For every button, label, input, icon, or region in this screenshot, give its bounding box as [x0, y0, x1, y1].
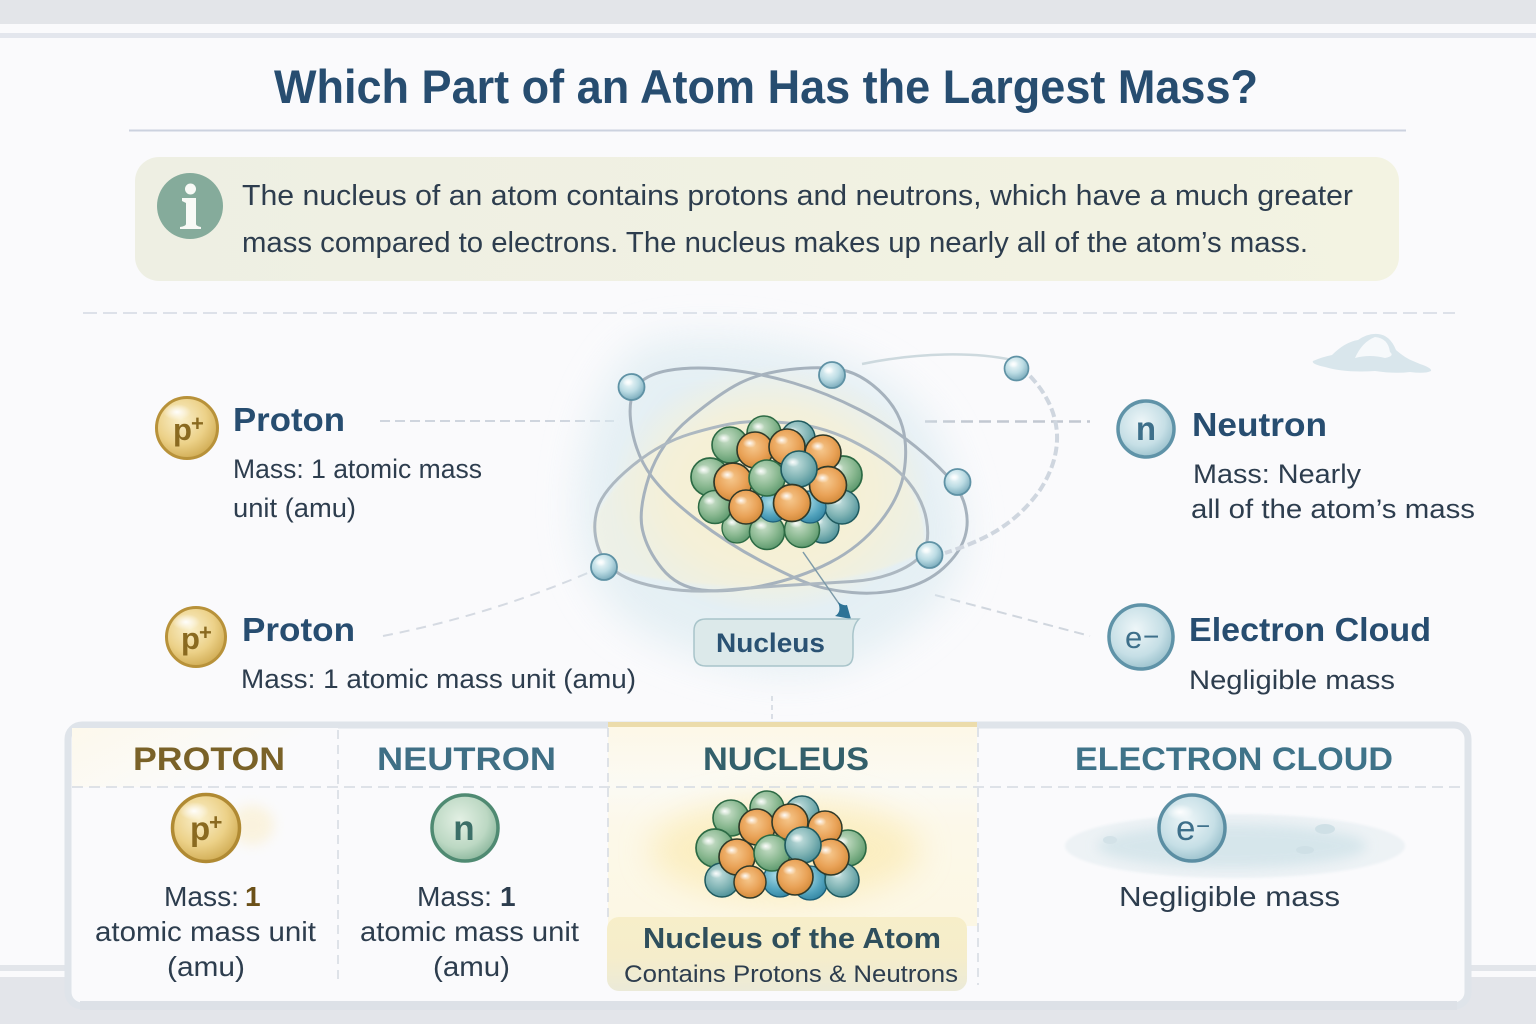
column: nucleus: NUCLEUS	[703, 741, 869, 777]
nucleus caption: Nucleus of the Atom	[643, 923, 941, 955]
label: electron cloud: Negligible mass	[1189, 665, 1395, 695]
column: proton	[95, 741, 316, 982]
nucleus label: Nucleus	[716, 628, 825, 658]
title: Which Part of an Atom Has the Largest Mass?	[274, 60, 1258, 113]
icon: neutron	[432, 795, 498, 861]
icon: electron in cloud: −	[1196, 813, 1210, 840]
column: proton: (amu)	[167, 951, 245, 982]
electrons	[591, 356, 1028, 580]
label: neutron: Mass: Nearly	[1193, 459, 1362, 489]
icon: proton: +	[199, 620, 212, 645]
nucleus label	[694, 619, 859, 666]
label: proton lower	[166, 608, 636, 694]
column: neutron: atomic mass unit	[360, 916, 579, 947]
column: electron cloud: ELECTRON CLOUD	[1075, 741, 1393, 777]
label: neutron	[1118, 401, 1475, 524]
panel: comparison table	[68, 722, 1468, 1010]
panel: info callout	[135, 157, 1399, 281]
icon: neutron: n	[453, 809, 475, 848]
icon: proton: p	[190, 810, 210, 847]
icon: neutron: n	[1136, 410, 1156, 447]
column: electron cloud: Negligible mass	[1119, 881, 1340, 912]
column: neutron	[360, 741, 579, 982]
column: proton: Mass:	[164, 881, 239, 912]
label: electron cloud: Electron Cloud	[1189, 611, 1431, 648]
icon: neutron	[1118, 401, 1174, 457]
nucleus caption	[607, 917, 967, 991]
icon: proton: p	[181, 621, 200, 656]
column: proton: atomic mass unit	[95, 916, 316, 947]
watercolor cloud	[578, 337, 964, 673]
icon: proton	[172, 794, 274, 862]
nucleus caption: Contains Protons & Neutrons	[624, 961, 958, 988]
icon: electron: −	[1143, 621, 1159, 652]
nucleus cluster	[696, 791, 866, 900]
arrow: to nucleus label	[803, 552, 851, 619]
icon: proton: +	[191, 411, 204, 436]
orbits	[595, 368, 967, 593]
label: proton lower: Mass: 1 atomic mass unit (amu)	[241, 664, 636, 694]
info text: The nucleus of an atom contains protons and neutrons, which have a much greater	[242, 180, 1354, 212]
icon: proton	[156, 398, 218, 458]
connector lines	[380, 421, 1090, 722]
label: proton upper: Mass: 1 atomic mass	[233, 454, 482, 484]
icon: proton: p	[173, 412, 192, 447]
label: proton upper	[156, 398, 482, 523]
column: nucleus background	[608, 722, 977, 926]
outer dashed orbit	[862, 354, 1057, 553]
icon: electron in cloud	[1065, 795, 1405, 878]
icon: electron	[1109, 605, 1173, 669]
column: electron cloud	[1065, 741, 1405, 912]
table dividers	[72, 728, 1465, 985]
label: electron cloud	[1109, 605, 1431, 695]
icon: proton: +	[209, 809, 222, 835]
nucleus cluster	[691, 416, 862, 550]
column: proton: 1	[245, 881, 261, 912]
column: neutron: Mass:	[417, 881, 492, 912]
column: proton: PROTON	[133, 741, 285, 777]
column: neutron: 1	[500, 881, 516, 912]
icon: small cloud	[1313, 334, 1431, 373]
label: proton upper: Proton	[233, 401, 345, 438]
icon: proton	[166, 608, 226, 666]
column: neutron: NEUTRON	[377, 741, 556, 777]
label: proton upper: unit (amu)	[233, 493, 356, 523]
label: proton lower: Proton	[242, 611, 355, 648]
icon: electron: e	[1125, 620, 1142, 655]
label: neutron: Neutron	[1192, 406, 1327, 443]
info text: mass compared to electrons. The nucleus makes up nearly all of the atom’s mass.	[242, 227, 1308, 259]
icon: info	[157, 173, 223, 239]
column: neutron: (amu)	[433, 951, 510, 982]
atom diagram	[578, 337, 1057, 673]
label: neutron: all of the atom’s mass	[1191, 494, 1475, 524]
column: nucleus	[607, 741, 967, 991]
icon: electron in cloud: e	[1176, 809, 1195, 848]
info text	[242, 180, 1354, 259]
